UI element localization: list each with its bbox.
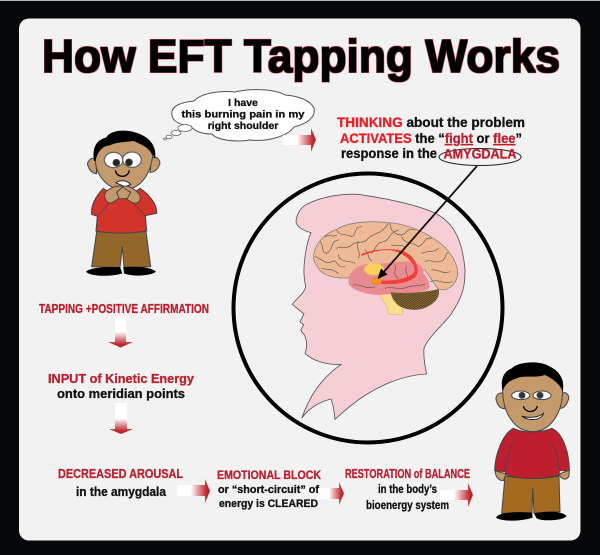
figure: worried person — [86, 131, 160, 276]
hair — [502, 362, 563, 392]
cerebellum — [391, 289, 439, 310]
head and brain illustration — [292, 194, 465, 419]
thought bubble — [164, 90, 314, 141]
step: decreased arousal: in the amygdala — [76, 485, 167, 499]
page frame top line — [0, 0, 600, 1]
face — [503, 370, 563, 432]
title: How EFT Tapping Works — [42, 30, 560, 82]
ears — [88, 157, 160, 174]
arrow: thought to amygdala text — [283, 128, 316, 152]
arrow: right 3 — [440, 483, 473, 507]
text: thinking activates: AMYGDALA — [444, 146, 517, 162]
shoes — [86, 267, 156, 276]
head silhouette — [292, 194, 465, 419]
arrow: amygdala pointer — [378, 166, 477, 279]
thought bubble: this burning pain in my — [182, 108, 305, 120]
text: thinking activates: response in the — [341, 146, 437, 161]
trail bubbles — [178, 124, 192, 132]
trousers — [502, 476, 560, 513]
ears — [496, 393, 569, 409]
hands — [495, 470, 569, 481]
amygdala — [372, 278, 382, 284]
shirt — [92, 188, 157, 233]
step: input: onto meridian points — [57, 387, 185, 401]
trousers — [92, 232, 151, 268]
figure: calm person — [495, 362, 569, 521]
circle: head frame — [234, 174, 502, 442]
step: emotional block: or “short-circuit” of — [218, 484, 319, 496]
shoes — [496, 512, 567, 521]
step: emotional block: EMOTIONAL BLOCK — [217, 468, 321, 482]
step: restoration: RESTORATION of BALANCE — [345, 467, 470, 481]
thought bubble: right shoulder — [208, 120, 278, 132]
step: restoration: bioenergy system — [366, 500, 449, 512]
step: tapping: TAPPING +POSITIVE AFFIRMATION — [39, 301, 209, 316]
eyes — [512, 391, 530, 400]
face — [95, 137, 153, 190]
brain stem — [379, 293, 402, 314]
brain folds — [315, 223, 452, 289]
mouth — [116, 181, 131, 187]
eyes — [104, 152, 123, 168]
smile — [522, 413, 543, 419]
nose — [115, 170, 129, 176]
nose — [523, 406, 537, 411]
text: thinking activates — [337, 115, 525, 162]
arrow: right 2 — [318, 482, 344, 505]
arrow: down 2 — [109, 403, 133, 434]
cerebrum — [314, 222, 458, 290]
step: decreased arousal: DECREASED AROUSAL — [58, 466, 183, 481]
step: input — [48, 372, 194, 401]
arrow: right 1 — [177, 479, 210, 503]
thalamus — [364, 263, 384, 275]
sleeve lines — [97, 202, 145, 216]
bubble text: I have — [228, 97, 258, 109]
limbic region — [348, 262, 429, 295]
shirt — [495, 428, 569, 479]
step: restoration — [345, 467, 470, 512]
clasped fingers — [117, 187, 131, 199]
sleeve lines — [505, 443, 559, 472]
step: input: INPUT of Kinetic Energy — [48, 372, 194, 386]
text: thinking activates: THINKING about the problem — [337, 115, 525, 130]
hippocampus — [361, 249, 418, 284]
hair — [93, 131, 155, 161]
hands — [105, 186, 140, 203]
amygdala ellipse — [439, 148, 521, 166]
step: emotional block — [217, 468, 321, 510]
step: decreased arousal — [58, 466, 183, 499]
step: emotional block: energy is CLEARED — [219, 498, 318, 510]
text: thinking activates: ACTIVATES the “fight or flee” — [340, 131, 522, 146]
arrow: down 1 — [108, 316, 133, 348]
cloud — [172, 90, 314, 141]
step: restoration: in the body’s — [378, 484, 437, 496]
